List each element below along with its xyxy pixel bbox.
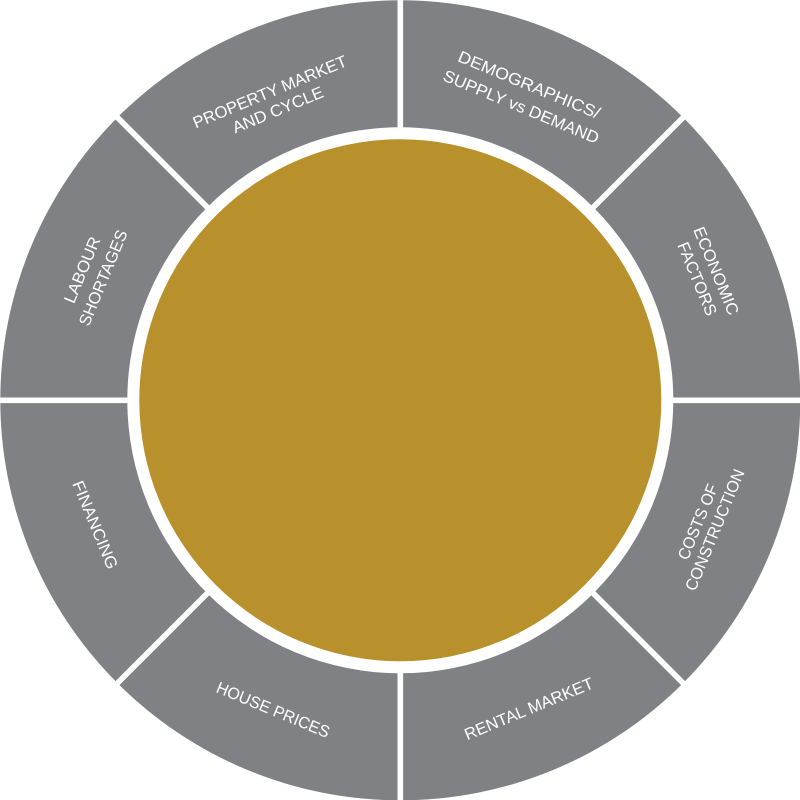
label: rental market: RENTAL MARKET: [462, 675, 596, 744]
label: labour shortages: LABOUR: [61, 234, 104, 306]
label: costs of construction: CONSTRUCTION: [682, 467, 749, 594]
label: demographics supply vs demand: DEMOGRAPHICS/: [455, 48, 603, 123]
label: labour shortages: SHORTAGES: [76, 228, 132, 329]
label: property market and cycle: PROPERTY MARKET: [190, 52, 350, 132]
label: house prices: HOUSE PRICES: [214, 679, 332, 742]
label: financing: FINANCING: [68, 478, 121, 572]
label: demographics supply vs demand: SUPPLY vs DEMAND: [440, 67, 602, 148]
label: economic factors: FACTORS: [673, 240, 720, 319]
label: costs of construction: COSTS OF: [675, 482, 722, 562]
label: property market and cycle: AND CYCLE: [230, 84, 326, 137]
central gold circle: [139, 139, 661, 661]
label: economic factors: ECONOMIC: [689, 224, 742, 318]
